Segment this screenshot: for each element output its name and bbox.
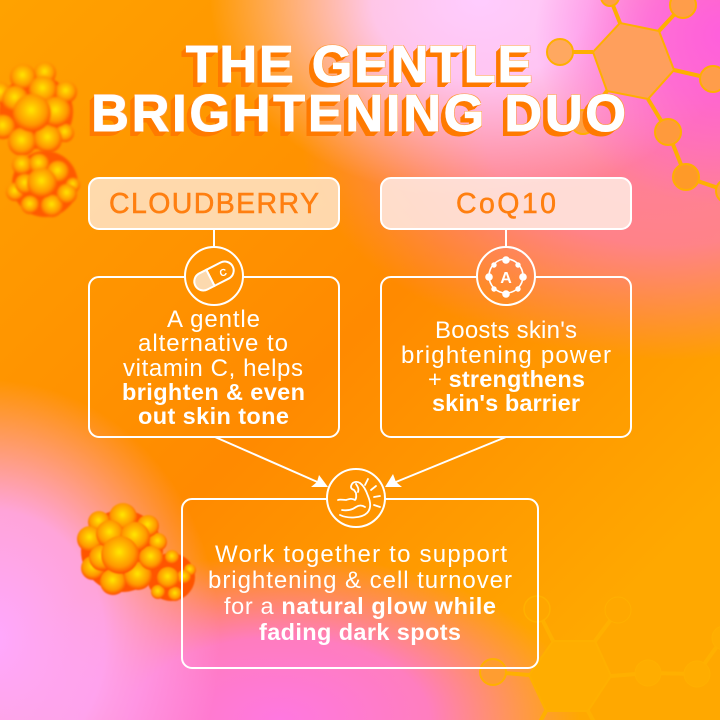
text: CoQ10 description: brightening power bbox=[401, 342, 611, 369]
label: Cloudberry: CLOUDBERRY bbox=[109, 188, 319, 220]
text: cloudberry description: brighten & even bbox=[122, 379, 305, 405]
icon: vitamin C capsule bbox=[185, 247, 243, 305]
title: BRIGHTENING DUO bbox=[91, 85, 629, 143]
text: cloudberry description: A gentle bbox=[167, 306, 260, 333]
icon: antioxidant ring bbox=[477, 247, 535, 305]
text: CoQ10 description: Boosts skin's bbox=[435, 317, 577, 344]
text: CoQ10 description bbox=[401, 317, 611, 416]
title: THE GENTLE bbox=[186, 36, 534, 94]
text: result description: fading dark spots bbox=[259, 619, 461, 645]
text: CoQ10 description: skin's barrier bbox=[432, 390, 580, 416]
text: result description: Work together to support bbox=[215, 541, 507, 568]
text: result description: for a natural glow while bbox=[224, 593, 496, 619]
berry: top left large bbox=[0, 62, 77, 156]
text: result description: brightening & cell turnover bbox=[208, 567, 512, 594]
berry: bottom small bbox=[147, 550, 196, 601]
text: cloudberry description: vitamin C, helps bbox=[123, 355, 303, 382]
text: CoQ10 description: + strengthens bbox=[428, 366, 585, 392]
text: cloudberry description: alternative to bbox=[138, 330, 288, 357]
icon: flexed arm bbox=[327, 469, 385, 527]
label: CoQ10: CoQ10 bbox=[456, 188, 556, 220]
text: cloudberry description: out skin tone bbox=[138, 403, 289, 429]
berry: bottom large bbox=[77, 503, 167, 595]
label: Cloudberry bbox=[89, 178, 339, 229]
arrow: cloudberry to result bbox=[215, 437, 328, 487]
label: CoQ10 bbox=[381, 178, 631, 229]
molecule: bottom right bbox=[480, 596, 720, 720]
title bbox=[90, 36, 629, 143]
icon: antioxidant ring: A bbox=[500, 270, 512, 287]
berry: top left small bbox=[6, 151, 80, 217]
icon: vitamin C capsule: C bbox=[218, 267, 228, 280]
text: result description bbox=[208, 541, 512, 645]
panel: result bbox=[182, 469, 538, 668]
text: cloudberry description bbox=[122, 306, 305, 429]
molecule: top right bbox=[547, 0, 720, 203]
panel: cloudberry bbox=[89, 229, 339, 437]
panel: CoQ10 bbox=[381, 229, 631, 437]
arrow: CoQ10 to result bbox=[385, 437, 506, 487]
